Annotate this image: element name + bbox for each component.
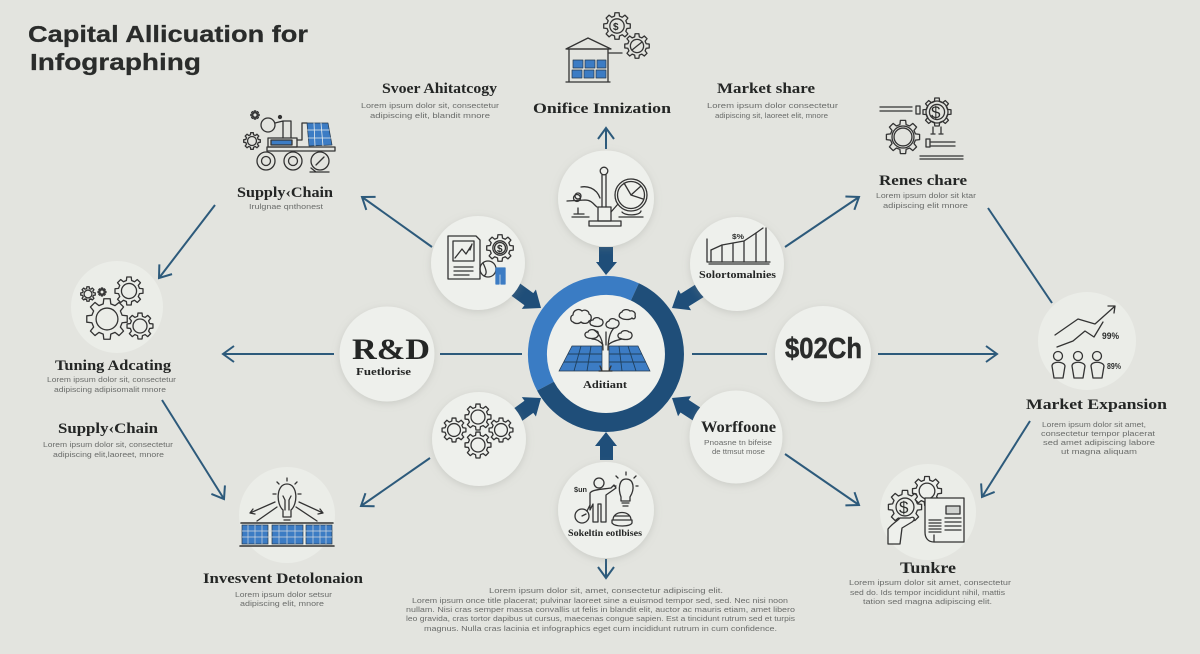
title: Capital Allicuation for [28, 21, 308, 47]
panel: central ring [537, 285, 674, 422]
text block: consectetur tempor placerat [1041, 429, 1156, 438]
text block: Lorem ipsum dolor sit amet, [1042, 420, 1146, 429]
ring: dark segment [546, 292, 674, 422]
text block [707, 101, 839, 120]
text block: bottom paragraph: leo gravida, cras tortor dapibus ut cursus, maecenas congue sapien. Est a tincidunt rutrum sed et turpis [406, 614, 795, 623]
arrow: value to market expansion [878, 353, 997, 355]
label: bottom circle: Sokeltin eotlbises [568, 529, 642, 539]
connector: centre to R&D [440, 353, 522, 355]
arrow: supply chain to tuning [159, 205, 215, 278]
text block: bottom paragraph [406, 586, 795, 633]
panel: bottom circle [558, 462, 654, 558]
text block: sed do. Ids tempor incididunt nihil, mattis [850, 588, 1005, 597]
percent labels: 99% [1102, 331, 1119, 341]
arrow: top up to onifice [605, 128, 607, 149]
panel: svoer ahitatcogy [361, 81, 500, 120]
heading: Invesvent Detolonaion [203, 571, 364, 587]
panel: supply chain top [237, 111, 335, 211]
dollar sign: $ [497, 244, 503, 255]
icon: person, bulb and dome [575, 472, 638, 526]
ring: blue segment [537, 285, 635, 386]
panel: upper right circle [690, 217, 784, 311]
dollar sign: $ [613, 22, 619, 33]
heading: value: $02Ch [785, 333, 862, 365]
panel: value circle [775, 306, 871, 402]
text block: Lorem ipsum dolor setsur [235, 590, 333, 599]
text block [361, 101, 500, 120]
arrow: tuning to investment [162, 400, 224, 499]
text block: bottom paragraph: magnus. Nulla cras lacinia et infographics eget cum incididunt rutrum in cum confidence. [424, 624, 777, 633]
label: chart: Solortomalnies [699, 270, 776, 281]
heading: Supply‹Chain [237, 185, 334, 201]
icon: four gears [442, 404, 513, 458]
arrow: lower right to tunkre [785, 454, 859, 505]
thick arrow: upper left into ring [505, 277, 548, 318]
label: centre: Aditiant [583, 380, 628, 391]
text block: bottom paragraph: Lorem ipsum once title placerat; pulvinar laoreet sine a euismod tempor sed, sed. Nec nisi noon [412, 596, 788, 605]
heading: workforce: Worffoone [701, 419, 776, 436]
heading: Supply‹Chain [58, 421, 159, 437]
icon: bulb over solar panels [240, 478, 334, 546]
panel: lower left gears circle [432, 392, 526, 486]
text block [849, 578, 1012, 606]
panel: onifice innization [533, 13, 672, 117]
text: workforce: Pnoasne tn bifeise [704, 438, 772, 447]
title: Infographing [30, 49, 201, 75]
thick arrow: lower right into ring [665, 388, 709, 428]
text block: Lorem ipsum dolor sit ktar [876, 191, 977, 200]
arrow: upper right to renes chare [785, 197, 859, 247]
panel: renes chare [876, 98, 977, 210]
text block: Lorem ipsum dolor sit amet, consectetur [849, 578, 1012, 587]
heading: Svoer Ahitatcogy [382, 81, 498, 97]
icon: gears and dollar [880, 98, 963, 159]
text: workforce: de ttmsut mose [712, 447, 765, 456]
dollar sign: $ [931, 103, 941, 122]
label: R&D: Fuetlorise [356, 366, 411, 378]
panel: R&D circle [340, 306, 434, 402]
panel: tuning adcating [47, 261, 177, 394]
icon: gears, hand and document [888, 476, 964, 544]
arrow: lower left to investment [361, 458, 430, 506]
text: workforce [704, 438, 772, 456]
arrow: upper left to supply chain [362, 197, 432, 247]
connector: renes chare to market expansion [988, 208, 1052, 303]
text block: Irulgnae qnthonest [249, 202, 324, 211]
heading: Tunkre [900, 560, 956, 577]
text block [876, 191, 977, 210]
icon: solar machine [244, 111, 335, 172]
percent labels: 89% [1107, 362, 1121, 371]
text block: Lorem ipsum dolor sit, consectetur [47, 375, 177, 384]
icon: tree and solar panels [559, 310, 650, 371]
text block: adipiscing elit mnore [883, 201, 968, 210]
thick arrow: bottom into ring [595, 432, 617, 460]
panel: market expansion [1026, 292, 1168, 456]
panel: upper left circle [431, 216, 525, 310]
text block: adipiscing elit,laoreet, mnore [53, 450, 164, 459]
text block [1041, 420, 1156, 456]
thick arrow: top into ring [596, 247, 617, 275]
icon: bar trend chart [707, 228, 770, 264]
text block: bottom paragraph: nullam. Nisi cras semper massa convallis ut felis in blandit elit, auctor ac mauris etiam, amet libero [406, 605, 795, 614]
arrow: bottom down to text [605, 559, 607, 578]
icon: report, gear and person [448, 235, 513, 284]
icon label: $un [574, 487, 587, 494]
panel: supply chain lower [43, 421, 174, 459]
arrow: market expansion to tunkre [982, 421, 1030, 497]
text block: ut magna aliquam [1061, 447, 1137, 456]
icon: trend lines and people [1052, 306, 1115, 378]
panel: investment [203, 467, 364, 608]
panel: market share [707, 81, 839, 120]
thick arrow: lower left into ring [506, 388, 548, 428]
heading: R&D: R&D [352, 333, 430, 366]
thick arrow: upper right into ring [666, 278, 711, 318]
percent labels [1102, 331, 1121, 371]
text block [47, 375, 177, 394]
heading: onifice innization: Onifice Innization [533, 101, 672, 117]
text block: adipiscing adipisomalit mnore [54, 385, 166, 394]
heading: Renes chare [879, 173, 967, 189]
panel: workforce circle [690, 390, 782, 484]
text block [235, 590, 333, 608]
text block: Lorem ipsum dolor consectetur [707, 101, 839, 110]
heading: Market Expansion [1026, 397, 1168, 413]
panel: top circle [558, 150, 654, 246]
dollar sign: $ [899, 498, 909, 517]
text block: adipiscing sit, laoreet elit, mnore [715, 111, 828, 120]
chart percent: $% [732, 234, 745, 241]
icon: building with gears [566, 13, 649, 82]
text block: adipiscing elit, blandit mnore [370, 111, 490, 120]
arrow: R&D to tuning [223, 353, 334, 355]
text block [43, 440, 174, 459]
icon: gears [81, 277, 153, 339]
heading: Tuning Adcating [55, 358, 172, 374]
connector: centre to value [692, 353, 767, 355]
panel: tunkre [849, 464, 1012, 606]
text block: Lorem ipsum dolor sit, consectetur [43, 440, 174, 449]
text block: adipiscing elit, mnore [240, 599, 324, 608]
solar panels [242, 525, 332, 544]
icon: gauge and lever [567, 167, 647, 226]
text block: bottom paragraph: Lorem ipsum dolor sit, amet, consectetur adipiscing elit. [489, 586, 723, 595]
text block: sed amet adipiscing labore [1043, 438, 1155, 447]
text block: Lorem ipsum dolor sit, consectetur [361, 101, 500, 110]
heading: Market share [717, 81, 815, 97]
text block: tation sed magna adipiscing elit. [863, 597, 992, 606]
title [28, 21, 308, 75]
